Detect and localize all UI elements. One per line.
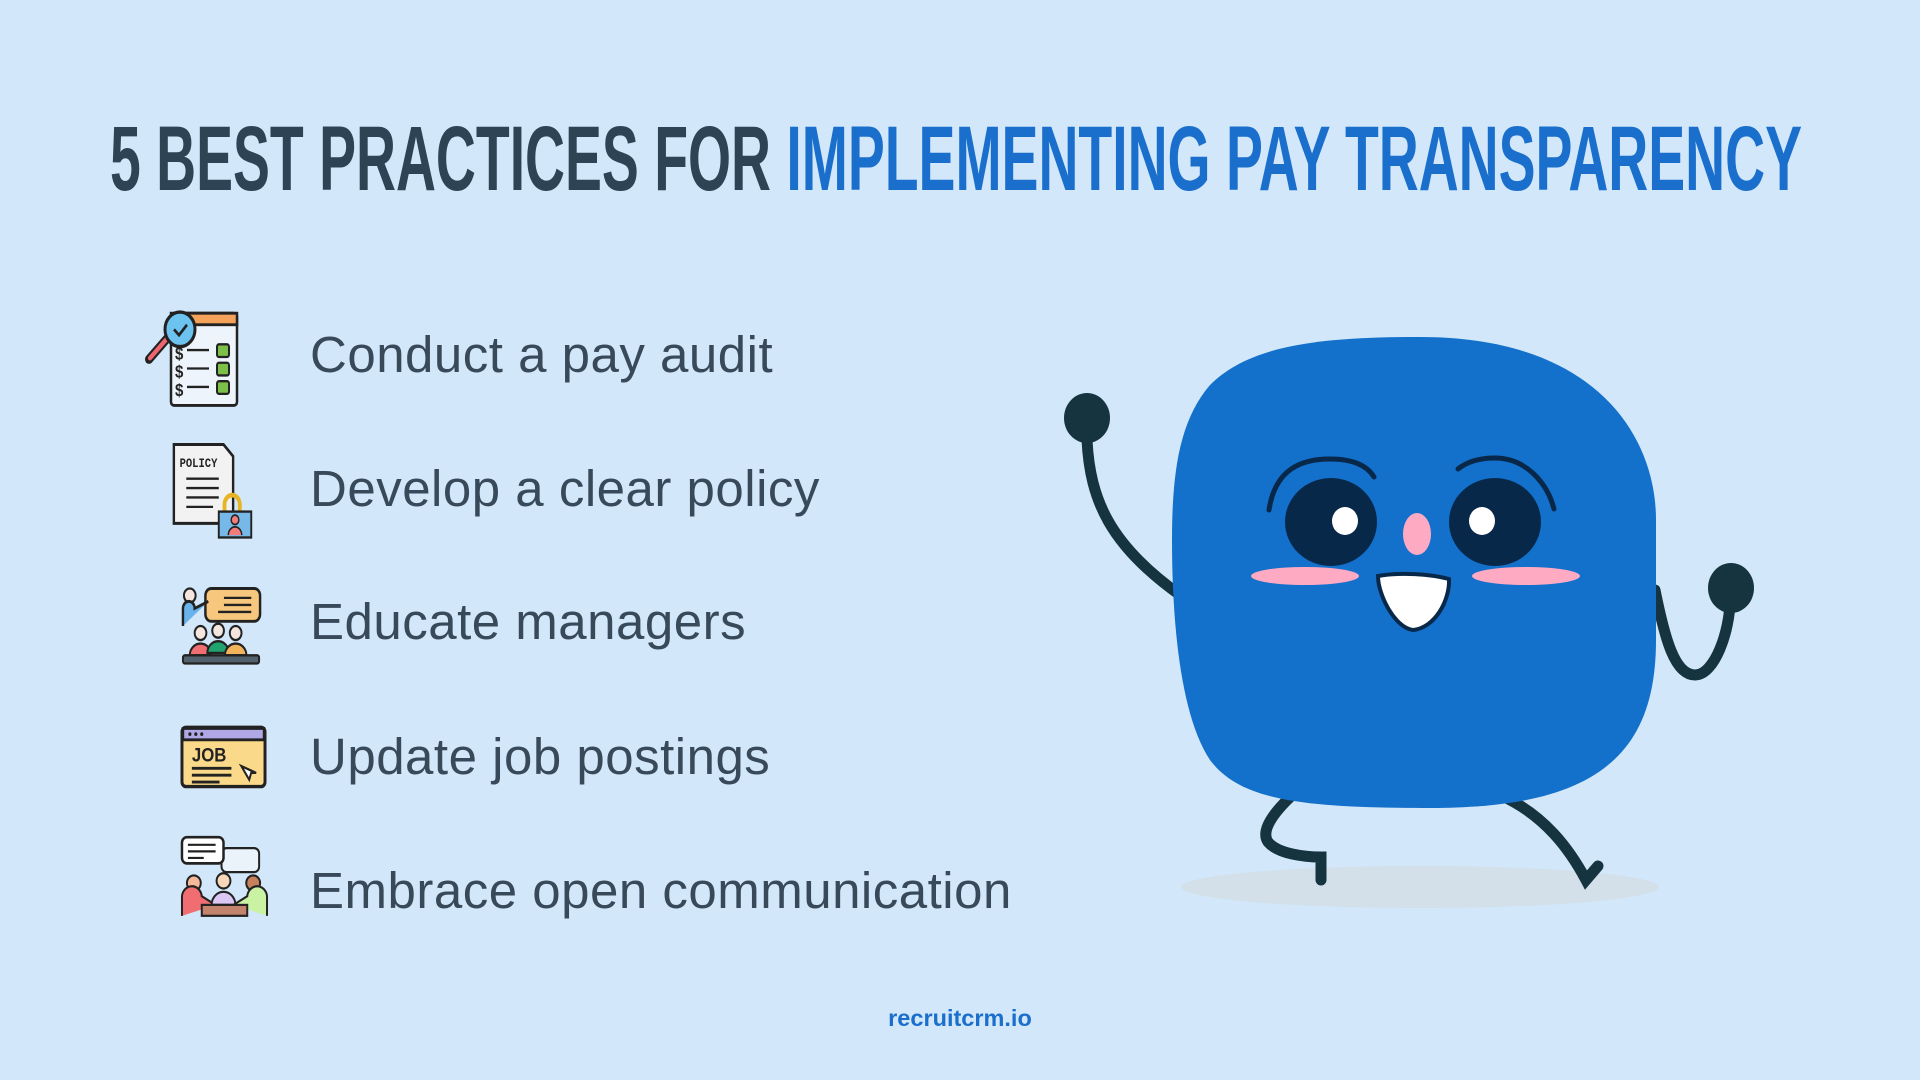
- icon: pay audit: $: [175, 381, 183, 400]
- icon: job posting: [180, 726, 266, 788]
- text: develop a clear policy: Develop a clear policy: [310, 460, 820, 517]
- arms and legs: [1087, 440, 1730, 880]
- icon: pay audit: $: [175, 363, 183, 382]
- text: update job postings: Update job postings: [310, 728, 770, 785]
- text: embrace open communication: Embrace open communication: [310, 862, 1012, 919]
- footer: website: recruitcrm.io: [888, 1005, 1032, 1031]
- hands: [1064, 393, 1110, 443]
- icon: policy: POLICY: [180, 456, 218, 471]
- icon: pay audit: $: [175, 344, 183, 364]
- shadow: [1181, 866, 1659, 908]
- icon: job posting: JOB: [192, 744, 226, 766]
- icon: educate managers: [182, 587, 262, 665]
- nose and cheeks: [1403, 513, 1431, 555]
- body: [1172, 337, 1656, 808]
- text: educate managers: Educate managers: [310, 593, 746, 650]
- icon: pay audit: [145, 310, 238, 407]
- mouth: [1378, 574, 1449, 630]
- icon: communication: [180, 836, 268, 917]
- eyes: [1269, 458, 1554, 566]
- icon: policy: [172, 443, 252, 539]
- text: conduct a pay audit: Conduct a pay audit: [310, 326, 773, 383]
